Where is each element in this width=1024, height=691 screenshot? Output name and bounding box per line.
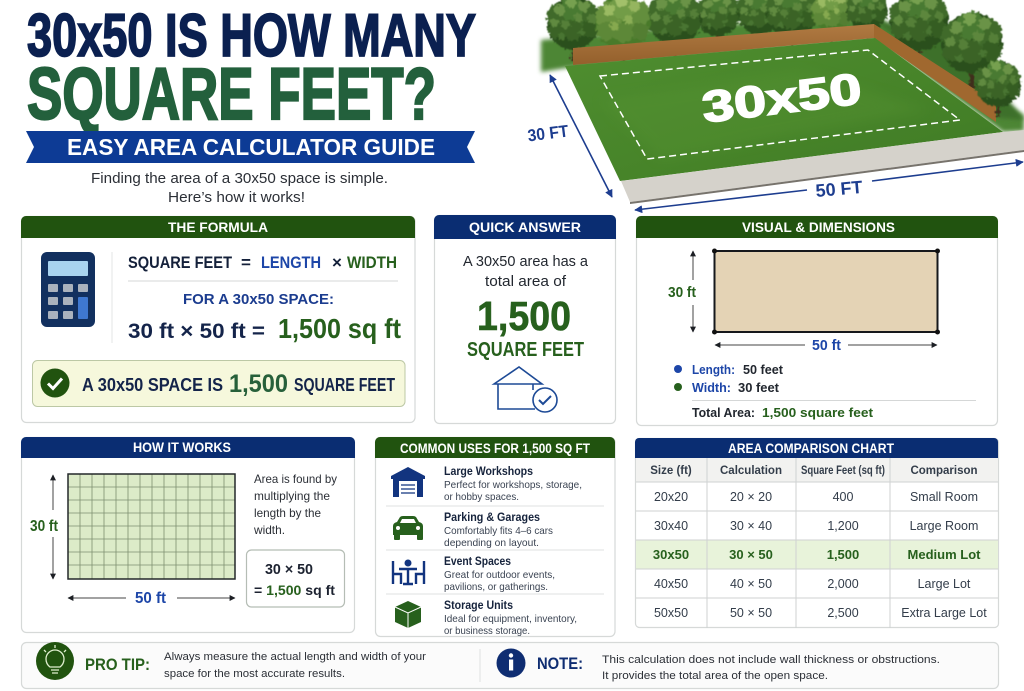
30 ft label: 30 FT (527, 122, 570, 145)
formula subheading: FOR A 30x50 SPACE: (183, 291, 334, 308)
highlighted row: 30 × 50 (729, 547, 773, 562)
note text: This calculation does not include wall thickness or obstructions. (602, 654, 940, 666)
legend: width: 30 feet (738, 381, 780, 395)
highlighted row: Medium Lot (908, 547, 981, 562)
quick answer text (463, 253, 589, 290)
explanation text (253, 472, 337, 537)
panel: quick answer (434, 215, 616, 424)
row 50x50 (654, 606, 987, 620)
formula calculation: 30 ft × 50 ft = (128, 320, 265, 343)
intro text (91, 170, 388, 206)
row 40x50: 40 × 50 (730, 577, 772, 591)
big unit: SQUARE FEET (467, 339, 584, 361)
title line 2: SQUARE FEET? (27, 54, 436, 135)
height arrow: 30 ft (30, 518, 58, 535)
explanation text: multiplying the (254, 489, 330, 503)
30 ft arrow (550, 75, 612, 197)
50 ft arrow (635, 162, 1023, 210)
tree front right (975, 60, 1021, 117)
legend: width (674, 381, 780, 395)
legend: length: Length: (692, 363, 735, 377)
use: parking and garages: Comfortably fits 4–6 cars (444, 525, 553, 537)
lawn (565, 38, 1003, 181)
row 20x20: 400 (833, 490, 853, 504)
quick answer text: A 30x50 area has a (463, 253, 589, 270)
use: large workshops: Large Workshops (444, 466, 533, 478)
big number: 1,500 (477, 293, 571, 339)
note text: It provides the total area of the open space. (602, 670, 828, 682)
use: large workshops: or hobby spaces. (444, 491, 519, 503)
row 20x20 (654, 490, 978, 504)
use: event spaces: Great for outdoor events, (444, 569, 555, 581)
use: storage units: Ideal for equipment, inventory, (444, 613, 577, 625)
formula equation: SQUARE FEET (128, 253, 233, 272)
formula equation: LENGTH (261, 253, 321, 272)
title (27, 2, 476, 135)
row 50x50: Extra Large Lot (901, 606, 987, 620)
title line 1: 30x50 IS HOW MANY (27, 2, 476, 69)
use: large workshops: Perfect for workshops, storage, (444, 479, 582, 491)
row 50x50: 2,500 (827, 606, 859, 620)
visual header (636, 216, 998, 238)
panel: the formula (21, 216, 415, 422)
height arrow (30, 475, 58, 579)
callout: result (32, 360, 405, 406)
ribbon subtitle (26, 131, 475, 163)
row 30x40: Large Room (910, 519, 978, 533)
calculation box: 30 × 50 (265, 561, 313, 578)
row 50x50: 50x50 (654, 606, 688, 620)
dashed plot outline (600, 50, 960, 159)
use: large workshops (391, 466, 582, 503)
icon: calculator (41, 252, 95, 327)
use: parking and garages (393, 512, 553, 549)
pro tip label: PRO TIP: (85, 655, 150, 674)
icon: info (496, 648, 526, 678)
explanation text: length by the (254, 506, 321, 520)
how it works header (21, 437, 355, 458)
row 40x50: Large Lot (918, 577, 971, 591)
ribbon subtitle: EASY AREA CALCULATOR GUIDE (67, 134, 435, 160)
table column heads: Size (ft) (650, 465, 692, 477)
row 40x50: 2,000 (827, 577, 859, 591)
note label: NOTE: (537, 654, 583, 673)
panel: area comparison chart (635, 438, 998, 628)
panel: common uses (375, 437, 615, 637)
formula equation: = (241, 253, 251, 272)
highlighted row: 30x50 (653, 547, 689, 562)
50 ft label: 50 FT (815, 177, 863, 201)
explanation text: width. (253, 523, 285, 537)
width arrow: 50 ft (135, 590, 166, 607)
formula header: THE FORMULA (168, 220, 268, 235)
formula equation: × (332, 253, 342, 272)
icon: table and chairs (393, 560, 424, 584)
use: event spaces: pavilions, or gatherings. (444, 581, 548, 593)
chart header (635, 438, 998, 458)
table column heads: Comparison (910, 465, 978, 477)
use: parking and garages: Parking & Garages (444, 512, 540, 524)
explanation text: Area is found by (254, 472, 337, 486)
highlighted row (636, 540, 998, 569)
height dimension: 30 ft (668, 284, 696, 301)
formula equation: WIDTH (347, 253, 397, 272)
icon: car (393, 516, 423, 540)
pro tip text: space for the most accurate results. (164, 668, 345, 680)
total area: Total Area: (692, 406, 755, 420)
intro text: Finding the area of a 30x50 space is simple. (91, 170, 388, 187)
quick answer text: total area of (485, 273, 567, 290)
panel: how it works (21, 437, 355, 632)
background grass (541, 18, 1024, 132)
right fence (874, 24, 996, 122)
formula header (21, 216, 415, 238)
callout: result: SQUARE FEET (294, 375, 395, 395)
calculation box: = 1,500 sq ft (254, 582, 335, 598)
icon: light bulb (36, 642, 74, 680)
row 30x40: 1,200 (827, 519, 859, 533)
chart header: AREA COMPARISON CHART (728, 441, 895, 456)
formula equation (128, 253, 397, 272)
table column heads (636, 458, 998, 482)
visual header: VISUAL & DIMENSIONS (742, 220, 895, 235)
icon: check (40, 368, 70, 398)
row 50x50: 50 × 50 (730, 606, 772, 620)
use: storage units: or business storage. (444, 625, 530, 637)
row 40x50 (654, 577, 971, 591)
row 30x40: 30x40 (654, 519, 688, 533)
legend: length: 50 feet (743, 363, 784, 377)
panel: visual and dimensions (636, 216, 998, 426)
legend: width: Width: (692, 381, 731, 395)
icon: house check (494, 367, 557, 412)
total area: 1,500 square feet (762, 406, 874, 420)
uses header: COMMON USES FOR 1,500 SQ FT (400, 441, 591, 456)
row 30x40 (654, 519, 978, 533)
plot label: 30x50 (699, 64, 864, 133)
row 20x20: Small Room (910, 490, 978, 504)
calculation box (246, 550, 344, 607)
sidewalk (621, 130, 1024, 202)
use: storage units: Storage Units (444, 600, 513, 612)
callout: result: 1,500 (229, 370, 288, 398)
total area (692, 406, 874, 420)
formula calculation: 1,500 sq ft (278, 313, 401, 344)
icon: garage (391, 467, 425, 497)
quick answer header (434, 215, 616, 239)
use: event spaces (393, 556, 555, 593)
use: storage units (395, 600, 577, 637)
table column heads: Square Feet (sq ft) (801, 465, 885, 477)
formula calculation (128, 313, 401, 344)
quick answer header: QUICK ANSWER (469, 220, 581, 235)
lawn illustration (527, 0, 1024, 210)
highlighted row: 1,500 (827, 547, 859, 562)
dimension rectangle (712, 248, 940, 334)
use: event spaces: Event Spaces (444, 556, 511, 568)
row 20x20: 20 × 20 (730, 490, 772, 504)
note text (602, 654, 940, 682)
back trees (547, 0, 1003, 88)
icon: box (395, 601, 421, 628)
table column heads: Calculation (720, 465, 782, 477)
lawn shading (600, 70, 930, 160)
legend: length (674, 363, 784, 377)
use: parking and garages: depending on layout. (444, 537, 539, 549)
row 40x50: 40x50 (654, 577, 688, 591)
row 20x20: 20x20 (654, 490, 688, 504)
footer bar (22, 642, 998, 688)
intro text: Here’s how it works! (168, 189, 305, 206)
how it works header: HOW IT WORKS (133, 440, 231, 455)
width dimension: 50 ft (812, 338, 841, 354)
back fence (573, 24, 874, 65)
pro tip text: Always measure the actual length and width of your (164, 651, 426, 663)
height dimension (668, 251, 696, 332)
pro tip text (164, 651, 426, 680)
callout: result: A 30x50 SPACE IS (82, 375, 223, 395)
grid diagram (68, 474, 235, 579)
row 30x40: 30 × 40 (730, 519, 772, 533)
uses header (375, 437, 615, 458)
